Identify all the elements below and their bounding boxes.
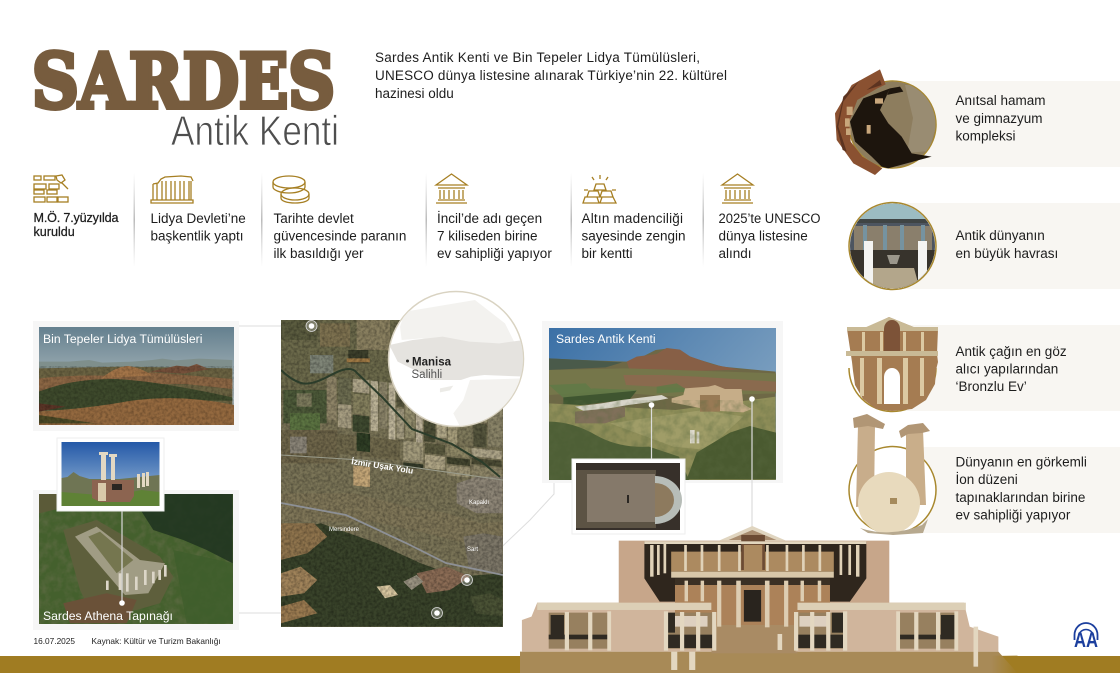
wing openings — [549, 613, 956, 649]
fact: UNESCO: dünya listesine — [718, 228, 808, 244]
panel text — [956, 344, 1067, 394]
place names: Manisa — [412, 356, 452, 368]
markers: Sardes city — [649, 396, 755, 527]
side wings — [522, 603, 711, 652]
inset photo: Athena temple columns — [57, 438, 164, 511]
satellite map — [281, 320, 503, 627]
footer: date and source — [34, 636, 221, 646]
fact: gold mining: sayesinde zengin — [582, 228, 686, 244]
logo: AA: AA — [1074, 629, 1098, 652]
photo: Athena temple aerial — [39, 493, 233, 624]
fact: founded: M.Ö. 7.yüzyılda — [34, 211, 118, 225]
fact: capital — [150, 176, 246, 244]
intro text: Sardes Antik Kenti ve Bin Tepeler Lidya Tümülüsleri, — [375, 50, 700, 65]
fact: gold mining: Altın madenciliği — [582, 211, 683, 226]
footer: date and source: 16.07.2025 — [34, 636, 75, 646]
panel text: alıcı yapılarından — [956, 362, 1058, 376]
image: bath complex — [835, 69, 937, 175]
panel: Ionic temple — [849, 414, 1120, 535]
image: synagogue interior — [849, 203, 936, 290]
fact: capital: Lidya Devleti’ne — [150, 211, 246, 226]
river and roads — [281, 369, 503, 575]
fact: gold mining — [582, 175, 686, 261]
photo: Bin Tepeler — [39, 327, 234, 425]
locator circle map — [388, 292, 527, 427]
fields — [281, 320, 503, 627]
icon: coins — [273, 176, 309, 203]
fact: founded — [34, 175, 118, 239]
panel text: Antik dünyanın — [956, 228, 1045, 243]
upper columns — [650, 543, 859, 577]
icon: gold bars — [583, 175, 616, 203]
wing columns — [565, 611, 978, 670]
intro text: hazinesi oldu — [375, 86, 454, 101]
subtitle: Antik Kenti: Antik Kenti — [171, 107, 339, 154]
icon: temple — [722, 174, 753, 203]
bottom gold bar — [0, 656, 1120, 673]
panel text — [956, 93, 1046, 144]
panel text: tapınaklarından birine — [956, 490, 1085, 505]
panel text: İon düzeni — [956, 472, 1018, 487]
fact: UNESCO — [718, 174, 820, 261]
intro text — [375, 50, 727, 101]
map markers — [306, 320, 472, 618]
panel: Bronze House — [846, 317, 1120, 412]
road label: İzmir Uşak Yolu — [351, 456, 414, 476]
place names — [406, 356, 452, 381]
caption: Athena temple: Sardes Athena Tapınağı — [43, 609, 173, 623]
icon: temple — [436, 174, 467, 203]
wing entablatures — [537, 603, 966, 610]
fact: coinage — [273, 176, 406, 261]
panel text: en büyük havrası — [956, 246, 1058, 261]
courtyard — [711, 625, 797, 653]
footer: date and source: Kaynak: Kültür ve Turizm Bakanlığı — [92, 636, 221, 646]
icon: bricks and trowel — [34, 175, 68, 202]
inset photo: synagogue plan — [572, 459, 685, 534]
fact: coinage: güvencesinde paranın — [274, 228, 406, 244]
ground — [520, 652, 1018, 673]
panel: synagogue — [849, 202, 1120, 290]
fact: seven churches: ev sahipliği yapıyor — [437, 246, 552, 261]
village labels: Kapaklı — [469, 500, 489, 506]
panel text — [956, 228, 1058, 261]
caption: Sardes ancient city: Sardes Antik Kenti — [556, 332, 656, 346]
lower columns — [685, 581, 821, 627]
fact: seven churches — [436, 174, 552, 261]
intro text: UNESCO dünya listesine alınarak Türkiye’nin 22. kültürel — [375, 68, 727, 83]
image: Bronze House facade — [846, 317, 938, 411]
village labels: Mersindere — [329, 527, 360, 533]
fact: coinage: Tarihte devlet — [274, 211, 354, 226]
frame: Sardes ancient city — [542, 321, 783, 483]
upper block — [619, 541, 889, 603]
fact dividers — [134, 173, 704, 267]
frame: Bin Tepeler — [33, 321, 239, 431]
fact: UNESCO: 2025’te UNESCO — [718, 211, 820, 226]
fact: UNESCO: alındı — [718, 246, 752, 261]
fact: coinage: ilk basıldığı yer — [274, 246, 364, 261]
connector and marker: Athena temple — [119, 511, 125, 606]
logo: AA — [1074, 623, 1098, 652]
panel text: Anıtsal hamam — [956, 93, 1046, 108]
image: Ionic columns and drum — [853, 414, 930, 535]
panel: bath and gymnasium — [835, 69, 1120, 175]
village labels — [329, 500, 489, 553]
icon: ruined temple — [151, 176, 193, 203]
panel text: Antik çağın en göz — [956, 344, 1067, 359]
fact: seven churches: 7 kiliseden birine — [437, 228, 538, 244]
photo: Sardes ancient city — [549, 328, 776, 480]
frame: Athena temple aerial — [33, 490, 239, 630]
frame: Bin Tepeler: Bin Tepeler Lidya Tümülüsleri — [43, 332, 202, 346]
connector lines — [233, 326, 554, 613]
panel text: ve gimnazyum — [956, 111, 1043, 126]
title: SARDES: SARDES — [32, 38, 335, 126]
panel text: kompleksi — [956, 128, 1016, 144]
village labels: Sart — [467, 547, 478, 553]
place names: Salihli — [412, 369, 442, 381]
panel text: ev sahipliği yapıyor — [956, 508, 1071, 522]
fact: founded: kuruldu — [34, 225, 75, 239]
recessed dark walls — [644, 542, 866, 602]
panel text: Dünyanın en görkemli — [956, 454, 1087, 470]
image: Sardes gymnasium building — [520, 526, 1018, 673]
fact: seven churches: İncil’de adı geçen — [437, 211, 542, 226]
fact: gold mining: bir kentti — [582, 246, 633, 261]
panel text: ‘Bronzlu Ev’ — [956, 379, 1027, 394]
panel text — [956, 454, 1087, 522]
fact: capital: başkentlik yaptı — [150, 228, 244, 244]
